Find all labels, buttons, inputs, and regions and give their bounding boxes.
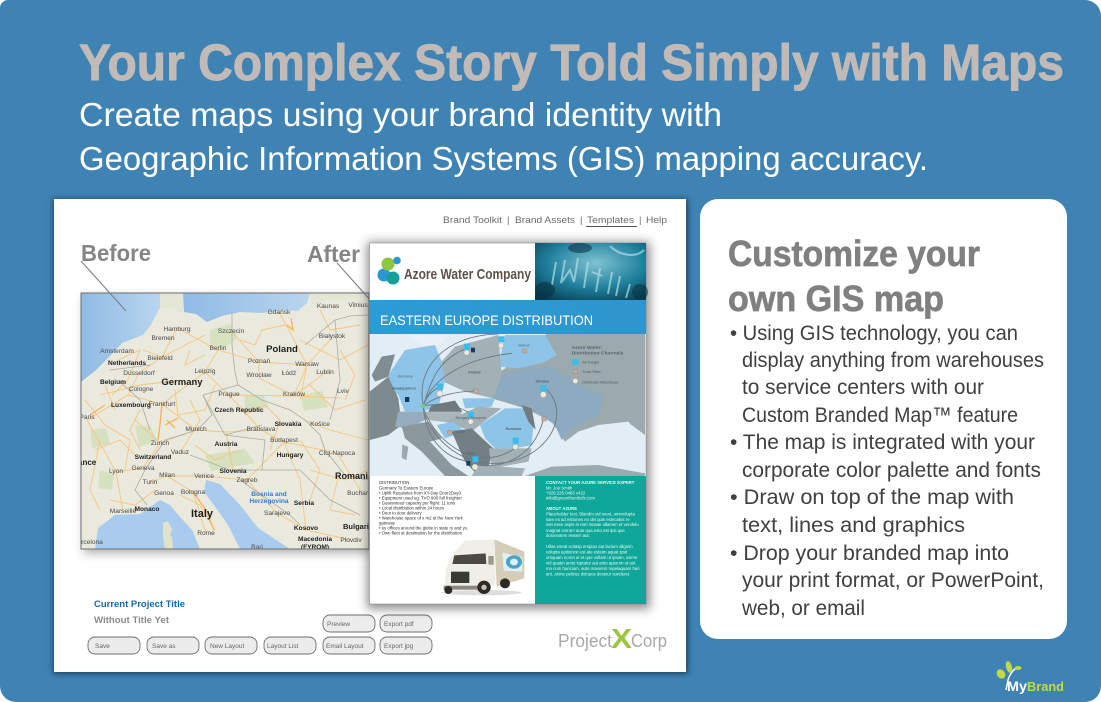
city labels: Zagreb: [237, 477, 258, 484]
before map: Macedonia: [298, 536, 332, 543]
before map: France: [70, 458, 97, 467]
subtitle: Create maps using your brand identity with: [79, 96, 722, 133]
before map: Kosovo: [294, 525, 318, 532]
map place labels: Hungary Budapest: [456, 416, 486, 420]
city labels: Munich: [185, 426, 207, 433]
before map: Switzerland: [135, 454, 171, 461]
navigation links: |: [507, 215, 509, 226]
before map: Italy: [191, 508, 214, 520]
map legend: Distributor Warehouse: [582, 381, 619, 385]
bullet list: • Using GIS technology, you can: [730, 322, 1018, 345]
flyer heading band: EASTERN EUROPE DISTRIBUTION: [380, 312, 593, 328]
city labels: Leipzig: [195, 368, 216, 375]
bullet list: display anything from warehouses: [742, 349, 1044, 372]
after leader line: [337, 263, 381, 312]
flyer distribution text: • Own fleet at destination for the distribution: [379, 530, 463, 536]
bullet list: Custom Branded Map™ feature: [742, 404, 1018, 427]
ProjectXCorp logo: [558, 623, 667, 654]
MyBrand logo: [995, 660, 1064, 694]
bullet list: corporate color palette and fonts: [742, 459, 1041, 482]
map legend: Distribution Channels: [572, 351, 624, 357]
flyer distribution text: • Local distribution within 24 hours: [379, 506, 444, 510]
flyer contact panel: dolorestem restem aut.: [546, 533, 590, 538]
city labels: Košice: [310, 421, 330, 428]
buttons: New Layout: [210, 643, 245, 650]
before map: Poland: [266, 344, 298, 355]
navigation links: Brand Toolkit: [443, 215, 502, 226]
flyer contact panel: san esse aspis in rem inusae ullamen et vendelu: [546, 522, 639, 527]
city labels: Paris: [79, 414, 95, 421]
flyer distribution text: DISTRIBUTION: [379, 480, 409, 485]
ProjectXCorp logo: X: [611, 623, 632, 654]
city labels: Cluj-Napoca: [319, 450, 355, 457]
before map: Belgium: [100, 379, 126, 386]
city labels: Bratislava: [247, 426, 276, 433]
city labels: Vilnius: [348, 302, 368, 309]
bullet list: [730, 322, 1044, 620]
route arcs: [422, 334, 557, 466]
city labels: Lviv: [337, 388, 350, 395]
title: Your Complex Story Told Simply with Maps: [79, 34, 1064, 91]
bullet list: • The map is integrated with your: [730, 431, 1035, 454]
before map: Luxembourg: [111, 402, 151, 409]
city labels: Venice: [194, 473, 214, 480]
panel: map application window: [53, 199, 688, 674]
city labels: Bielefeld: [147, 355, 173, 362]
flyer contact panel: Mr. Joe Smith: [546, 486, 573, 490]
bullet list: to service centers with our: [742, 376, 984, 399]
bullet list: your print format, or PowerPoint,: [742, 569, 1044, 592]
before map: (FYROM): [301, 544, 329, 551]
city labels: Szczecin: [218, 328, 245, 335]
navigation links: Brand Assets: [515, 215, 575, 226]
map legend: Truck Fleet: [582, 370, 600, 374]
city labels: Amsterdam: [100, 348, 134, 355]
flyer contact panel: info@greenthumbsfx.com: [546, 496, 595, 500]
before map: Monaco: [135, 506, 159, 513]
flyer contact panel: magnat estrum aute qua esto est ipsi que: [546, 528, 625, 533]
map place labels: Jelarus: [518, 344, 530, 348]
map place labels: Sofia: [467, 451, 476, 455]
buttons: Preview: [327, 621, 350, 628]
before map: Czech Republic: [214, 407, 264, 414]
map place labels: Romania: [506, 427, 522, 431]
city labels: Białystok: [319, 333, 346, 340]
buttons: Export pdf: [384, 621, 414, 628]
flyer contact panel: vid quatet amet luptatur aut anto aperum ut aut: [546, 560, 636, 566]
map place labels: Germany: [398, 375, 413, 379]
bullet list: • Draw on top of the map with: [730, 486, 1014, 509]
city labels: Kraków: [283, 391, 305, 398]
before map: Slovenia: [219, 468, 247, 475]
panel heading: [728, 233, 980, 319]
city labels: Zurich: [151, 440, 169, 447]
city labels: Barcelona: [73, 539, 103, 546]
flyer contact panel: mo cum hariciam, aute maiorem repelaquam hari: [546, 566, 640, 571]
subtitle: [79, 96, 928, 177]
flyer distribution text: • Warehouse space of x m2 at the New York: [379, 516, 464, 520]
buttons: Save: [95, 643, 110, 650]
flyer contact panel: +929.225.0483 x422: [546, 490, 586, 496]
city labels: Turin: [143, 479, 158, 486]
flyer distribution text: Germany To Eastern Europe: [379, 486, 434, 490]
city labels: Rome: [197, 530, 215, 537]
city labels: Lublin: [316, 369, 334, 376]
project title block: Without Title Yet: [94, 615, 169, 625]
city labels: Genoa: [154, 490, 174, 497]
flyer heading band: [370, 300, 646, 334]
map place labels: Headquarters: [392, 387, 416, 391]
before map: Netherlands: [108, 360, 146, 367]
flyer distribution text: • ey offices around the globe in state ry and ys.: [379, 526, 468, 530]
sea: north and baltic: [81, 293, 160, 382]
flyer contact panel: Ullas eseat scitasp erspian aut lacium alignim: [546, 544, 633, 549]
flyer contact panel: ant, alone pelicus dolopos desetur sunderet.: [546, 572, 630, 576]
ProjectXCorp logo: Corp: [631, 631, 667, 651]
city labels: Düsseldorf: [123, 370, 155, 377]
navigation links: |: [580, 215, 582, 226]
subtitle: Geographic Information Systems (GIS) mapping accuracy.: [79, 140, 928, 177]
city labels: Plovdiv: [340, 537, 362, 544]
panel: customize your own GIS map: [700, 199, 1067, 639]
buttons: [88, 615, 432, 654]
before map: Germany: [161, 377, 203, 388]
city labels: Budapest: [270, 437, 298, 444]
city labels: Gdańsk: [268, 309, 291, 316]
flyer contact panel: umquam nonet ut et que vollam ut ipsam, ssime: [546, 555, 638, 560]
map place labels: Poland: [468, 370, 481, 374]
flyer contact panel: [535, 476, 646, 604]
flyer contact panel: Placeholder text. Blandm vid ment, ommolupta: [546, 512, 635, 516]
buttons: Layout List: [267, 643, 299, 650]
navigation links: |: [639, 215, 641, 226]
before map: Slovakia: [275, 421, 302, 428]
project title block: Current Project Title: [94, 599, 185, 609]
navigation links: [443, 215, 667, 227]
corsica: [163, 521, 172, 539]
flyer distribution text: gateway: [379, 520, 396, 526]
after label: After: [307, 241, 360, 267]
before leader line: [81, 261, 126, 311]
flyer distribution text: • Door to door delivery: [379, 510, 422, 516]
before label: Before: [81, 240, 151, 266]
navigation links: Help: [646, 215, 667, 226]
flyer contact panel: sam es ad estiones eo del quis estecatus re: [546, 517, 630, 522]
panel heading: Customize your: [728, 233, 980, 274]
flyer distribution text: • Guaranteed capacity per flight: 11 tons: [379, 500, 455, 506]
city labels: Łódź: [282, 370, 296, 377]
city labels: Bologna: [181, 489, 205, 496]
flyer contact panel: volupta epitiorest est ate estium aquat ipsit: [546, 550, 628, 554]
before map: Romania: [335, 471, 374, 481]
before map: Austria: [215, 441, 238, 448]
borders: [110, 312, 368, 525]
flyer distribution text: • Uplift Requisites from XY-Day Door2Day3: [379, 490, 462, 496]
city labels: Kaunas: [317, 303, 340, 310]
road network: [85, 310, 368, 540]
green patches: [90, 324, 328, 490]
flyer contact panel: CONTACT YOUR AZURE SERVICE EXPERT: [546, 480, 635, 485]
city labels: Marseille: [110, 508, 137, 515]
city labels: Vaduz: [171, 449, 189, 456]
before map: Bosnia and: [251, 491, 287, 498]
city labels: Lyon: [109, 468, 123, 475]
flyer contact panel: ABOUT AZURE: [546, 506, 577, 511]
city labels: Sarajevo: [264, 510, 290, 517]
MyBrand logo: My: [1007, 678, 1027, 694]
city labels: Milan: [159, 472, 175, 479]
city labels: Poznań: [248, 358, 271, 365]
buttons: Save as: [152, 643, 176, 650]
city labels: Bari: [251, 544, 263, 551]
project title block: [94, 599, 185, 625]
panel heading: own GIS map: [728, 278, 944, 319]
before map: Bulgaria: [343, 522, 374, 531]
map place labels: Zagreb: [453, 429, 465, 433]
city labels: Bremen: [151, 335, 175, 342]
city labels: Bucharest: [347, 490, 377, 497]
city labels: Hamburg: [163, 326, 191, 333]
flyer distribution map: [370, 334, 645, 476]
city labels: Warsaw: [295, 361, 319, 368]
city labels: [73, 302, 377, 551]
flyer distribution text: • Equipment used eg. TVO 900 full freighter: [379, 496, 462, 500]
buttons: Export jpg: [384, 643, 414, 650]
flyer header logo: Azore Water Company: [404, 266, 532, 283]
flyer: after map: [367, 242, 650, 609]
before map: [70, 293, 377, 553]
flyer header logo: [378, 257, 532, 284]
city labels: Berlin: [210, 345, 227, 352]
city labels: Cologne: [129, 386, 154, 393]
buttons: Email Layout: [326, 643, 364, 650]
map place labels: [392, 344, 549, 455]
map legend: [572, 345, 624, 385]
navigation links: Templates: [587, 215, 634, 226]
truck illustration: [442, 539, 524, 595]
map legend: Azore Water:: [572, 345, 603, 351]
bullet list: web, or email: [741, 597, 865, 620]
map legend: Air Freight: [582, 360, 599, 364]
ProjectXCorp logo: Project: [558, 631, 612, 651]
city labels: Geneva: [131, 465, 155, 472]
before map: Serbia: [294, 500, 314, 507]
city labels: Prague: [218, 391, 240, 398]
bullet list: • Drop your branded map into: [730, 542, 1009, 565]
city labels: Frankfurt: [149, 401, 175, 408]
MyBrand logo: Brand: [1027, 679, 1064, 694]
city labels: Wrocław: [246, 372, 272, 379]
before map: Herzegovina: [249, 498, 289, 505]
before map: Hungary: [277, 452, 304, 459]
site markers: [405, 336, 546, 470]
map place labels: Ukraine: [536, 380, 549, 384]
sea: mediterranean and adriatic: [95, 500, 200, 549]
bullet list: text, lines and graphics: [742, 514, 965, 537]
flyer header water photo: [535, 243, 648, 300]
flyer distribution text: [379, 480, 468, 536]
